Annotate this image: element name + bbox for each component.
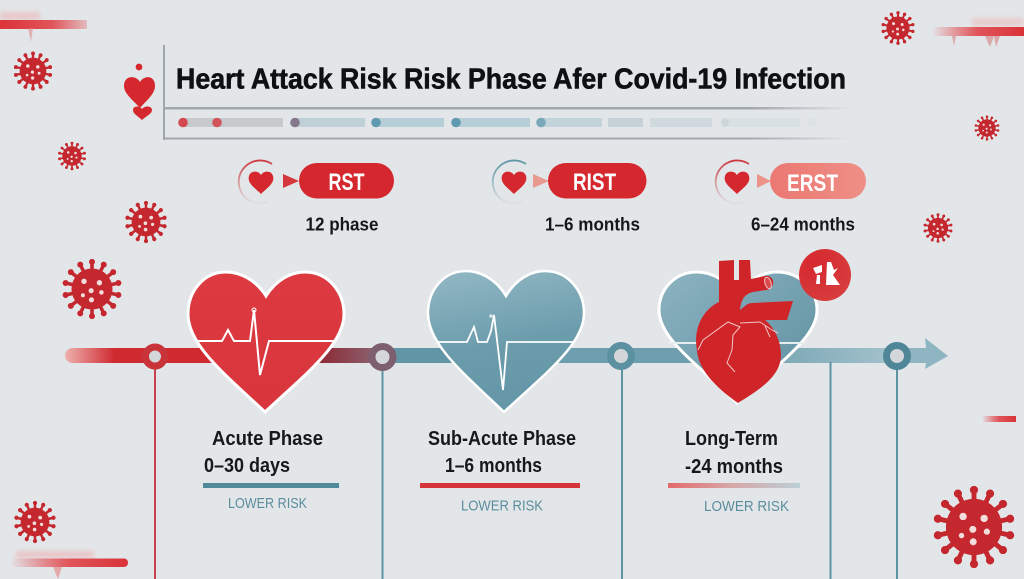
virus icon 3 [127,203,165,241]
virus icon 7 [976,117,998,139]
progress segments [178,118,816,127]
label block: sub-acute phase [420,428,580,514]
phase tag 2: RIST [573,169,616,196]
phase tag 2: 1–6 months [545,214,640,234]
phase tag 3: ERST [787,170,838,197]
icon: ring heart 2 [493,160,526,203]
timeline nodes [146,346,908,368]
heart: acute phase [188,272,344,412]
label block: long-term: -24 months [685,456,783,478]
phase tag 2 [493,160,646,234]
label block: sub-acute phase: LOWER RISK [461,498,543,514]
ECG trace [437,315,574,390]
arrow head [905,338,948,369]
label block: long-term: Long-Term [685,428,778,450]
phase tag 3: 6–24 months [751,214,855,234]
virus icon 8 [925,215,951,241]
icon: title heart [124,64,155,120]
virus icon 2 [59,143,85,169]
timeline [65,338,948,579]
label block: long-term [668,428,800,515]
ECG trace [196,310,335,375]
icon: ring heart 3 [716,160,749,203]
heart: sub-acute phase [428,271,584,412]
decorative streak: right [982,416,1016,422]
phase tag 1: RST [328,169,365,196]
label block: acute phase: Acute Phase [212,428,323,450]
label block: sub-acute phase: Sub-Acute Phase [428,428,576,450]
icon: ring heart 1 [239,160,273,203]
label block: long-term: LOWER RISK [704,498,789,515]
virus icon 1 [16,53,50,89]
label block: acute phase: LOWER RISK [228,495,307,512]
phase tag 1 [239,160,394,234]
virus icon 5 [16,503,54,541]
decorative streak: top right [932,18,1024,47]
phase tag 1: 12 phase [306,214,378,234]
label block: acute phase: 0–30 days [204,455,290,477]
virus icon 9 [938,490,1010,564]
vertical drop lines [155,362,897,579]
decorative streak: bottom left [10,551,128,579]
badge [799,249,851,301]
anatomical heart [696,260,793,403]
label block: sub-acute phase: 1–6 months [445,455,542,477]
label block: acute phase [203,428,339,512]
title: Heart Attack Risk Risk Phase Afer Covid-19 Infection [176,64,846,96]
title panel [163,45,852,140]
decorative streak: top left [0,12,87,42]
phase tag 3 [716,160,866,234]
virus icon 6 [883,13,913,43]
virus icon 4 [66,262,118,316]
heart: long-term [659,249,851,403]
